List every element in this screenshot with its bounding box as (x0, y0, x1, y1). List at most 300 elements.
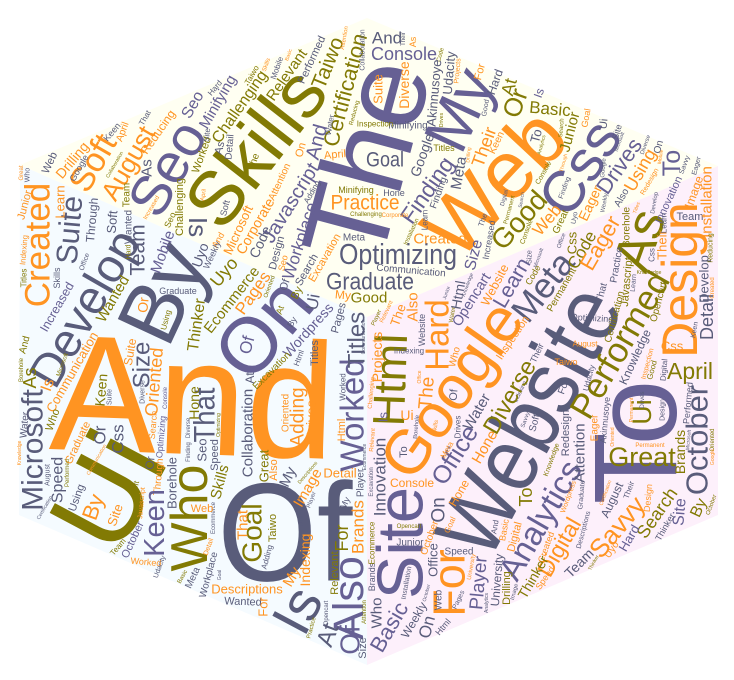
words: right panel: Pages (452, 589, 467, 610)
words: right panel: Knowledge (461, 272, 475, 298)
words: right panel: Size (526, 250, 534, 264)
words: right panel: Console (390, 476, 434, 490)
words: right panel: Develop (650, 191, 660, 214)
words: left panel: Also (268, 459, 280, 481)
words: left panel: Titles (20, 269, 28, 287)
words: left panel: For (332, 524, 352, 552)
words: right panel: Css (564, 231, 580, 254)
words: right panel: Permanent (629, 397, 635, 422)
words: left panel: Excavation (251, 350, 293, 392)
words: right panel: Html (448, 279, 468, 311)
words: right panel: August (598, 480, 627, 520)
words: top panel: Finding (558, 176, 572, 200)
words: left panel: Soft (104, 209, 121, 234)
words: right panel: Digital (659, 358, 669, 381)
words: left panel: Adding (259, 544, 275, 570)
words: right panel: The (387, 302, 409, 328)
words: top panel: Challenging (350, 212, 382, 218)
words: right panel: Who (447, 345, 463, 368)
words: left panel: Taiwo (267, 514, 279, 542)
words: left panel: Oriented (263, 275, 277, 299)
word: Of: Of (218, 454, 354, 610)
words: top panel: The (246, 152, 262, 172)
word: Web: Web (405, 91, 585, 275)
words: top panel: Taiwo (307, 34, 349, 92)
words: left panel: At (274, 304, 286, 316)
words: left panel: Udacity (153, 554, 167, 579)
words: right panel: Skills (432, 420, 440, 434)
words: top panel: Basic (284, 48, 294, 62)
words: left panel: Communication (361, 319, 367, 354)
words: top panel: Increased (481, 220, 497, 260)
words: top panel: For (472, 62, 488, 82)
words: top panel: Excavation (306, 232, 344, 284)
words: top panel: April (114, 121, 132, 143)
words: right panel: Relevant (369, 428, 377, 452)
words: right panel: University (467, 554, 477, 580)
words: top panel: Soft (218, 198, 232, 217)
words: top panel: Drilling (465, 147, 473, 163)
words: left panel: Wordpress (279, 300, 337, 360)
words: top panel: Site (610, 123, 624, 141)
words: right panel: Opencart (648, 281, 670, 323)
word: Is: Is (259, 576, 335, 644)
words: top panel: As (213, 140, 228, 156)
words: top panel: Analytics (537, 134, 548, 155)
words: right panel: Css (661, 338, 684, 354)
words: right panel: Basic (497, 518, 511, 542)
words: right panel: Savvy (583, 490, 651, 564)
word: Skills: Skills (168, 52, 344, 244)
words: right panel (363, 166, 718, 657)
words: left panel: Microsoft (56, 352, 70, 377)
words: left panel: Or (142, 456, 158, 470)
words: right panel: Design (642, 484, 654, 512)
word: For: For (424, 549, 474, 617)
words: left panel: Worked (338, 373, 348, 401)
words: left panel: Goal (217, 570, 223, 580)
words: left panel: Opencart (324, 600, 330, 625)
words: top panel: Also (612, 186, 632, 209)
words: top panel: On (293, 141, 309, 159)
words: left panel: My (276, 464, 300, 490)
words: left panel: Diverse (140, 380, 146, 404)
words: right panel: Oriented (610, 427, 616, 447)
words: top panel: Adding (302, 179, 322, 205)
words: left panel: Ecommerce (201, 263, 263, 337)
words: left panel: Practice (306, 616, 318, 639)
words: top panel: Suite (370, 74, 386, 104)
words: right panel: Good (645, 359, 659, 381)
words: left panel: Pages (329, 301, 349, 335)
words: right panel: Google (710, 449, 716, 465)
words: left panel: Knowledge (17, 440, 23, 465)
word: Google: Google (366, 288, 538, 492)
words: top panel: Is (531, 86, 547, 100)
words: left panel: Player (356, 468, 366, 497)
words: left panel: Javascript (137, 487, 147, 519)
words: left panel: Office (79, 252, 91, 272)
words: right panel: For (556, 377, 572, 396)
words: left panel: Oriented (280, 394, 292, 432)
words: right panel: Junior (396, 538, 424, 548)
words: left panel: Goal (236, 503, 268, 563)
words: right panel: Javascript (619, 257, 635, 307)
words: left panel: Uyo (188, 240, 212, 269)
word: Css: Css (526, 108, 634, 228)
words: top panel: And (210, 231, 226, 249)
words: right panel: Inspection (640, 348, 656, 380)
word: Ui: Ui (24, 411, 192, 571)
words: top panel: Console (519, 219, 535, 245)
words: left panel: Site (104, 502, 126, 528)
words: left panel: Is (38, 376, 58, 394)
words: top panel: Search (518, 191, 526, 208)
words: left panel: Drives (303, 400, 319, 440)
words: left panel: By (289, 284, 305, 301)
words: left panel: Ui (302, 292, 324, 312)
words: right panel: Water (460, 391, 494, 433)
words: left panel: Html (292, 349, 306, 367)
words: right panel: Knowledge (616, 327, 654, 387)
words: right panel: Analytics (491, 454, 589, 586)
words: top panel: Search (558, 118, 566, 138)
words: right panel: Office (417, 370, 423, 383)
words: right panel: Office (557, 232, 568, 249)
words: right panel: Search (632, 484, 682, 542)
words: right panel: Drives (454, 416, 462, 438)
words: top panel: Relevant (263, 45, 311, 104)
words: left panel: Of (236, 334, 259, 356)
words: right panel: Opencart (449, 270, 495, 330)
words: left panel: Using (159, 309, 173, 331)
words: left panel: That (234, 509, 252, 540)
words: top panel: Or (496, 84, 534, 122)
words: left panel: By (77, 491, 109, 523)
words: top panel: Taiwo (243, 63, 261, 86)
words: top panel: Team (122, 183, 132, 207)
words: left panel: Who (24, 168, 32, 182)
words: top panel: Skills (262, 57, 272, 73)
words: left panel: Image (290, 466, 326, 510)
words: right panel: Projects (369, 332, 385, 382)
words: right panel: Team (561, 545, 597, 581)
words: right panel: Uyo (602, 539, 622, 560)
words: right panel: Meta (439, 440, 456, 460)
words: top panel: Web (40, 150, 60, 176)
words: right panel: Keen (690, 321, 700, 339)
words: right panel: On (428, 497, 450, 523)
word: As: As (602, 202, 678, 278)
words: left panel: Html (336, 419, 348, 441)
words: top panel: Corporate (233, 195, 278, 257)
words: right panel: Eager (590, 414, 600, 441)
words: left panel: August (44, 464, 52, 486)
words: right panel: Created (536, 530, 556, 564)
words: right panel: October (419, 519, 441, 557)
words: right panel: Diverse (478, 355, 542, 439)
words: right panel: Great (608, 442, 676, 472)
words: right panel: Their (528, 342, 546, 364)
words: left panel: Uyo (206, 253, 242, 291)
words: left panel: Indexing (297, 534, 313, 586)
word: On: On (196, 260, 330, 396)
words: top panel: Minifying (338, 185, 374, 195)
words: right panel: Ecommerce (368, 521, 376, 564)
words: top panel: And (372, 28, 402, 48)
words: top panel: Finding (395, 152, 459, 228)
words: right panel: Oriented (710, 428, 716, 452)
words: right panel: Code (564, 228, 600, 272)
words: right panel: Savvy (520, 411, 532, 429)
words: top panel: Finding (428, 176, 450, 210)
words: top panel: Weekly (600, 193, 610, 213)
word: Created: Created (18, 183, 58, 307)
words: top panel: Redesign (640, 167, 660, 197)
words: top panel: Challenging (209, 68, 271, 146)
words: right panel: Taiwo (554, 357, 578, 367)
words: right panel: Basic (365, 597, 413, 657)
words: right panel: The (415, 376, 439, 410)
words: top panel: Water (324, 114, 336, 136)
words: top panel: Seo (179, 88, 208, 122)
words: top panel: Code (246, 223, 274, 261)
words: right panel: Thinker (653, 512, 677, 542)
words: right panel: Microsoft (685, 429, 693, 450)
words: right panel: Borehole (413, 414, 421, 439)
words: top panel: Drilling (52, 138, 92, 182)
words: right panel: Created (710, 277, 716, 299)
words: left panel: Worked (334, 358, 370, 472)
words: top panel: Their (401, 32, 407, 46)
words: top panel: Savvy (678, 154, 692, 175)
words: top panel: Diverse (640, 134, 653, 156)
words: left panel (15, 165, 373, 659)
words: top panel: Permanent (503, 195, 517, 225)
words: top panel: Attention (267, 162, 293, 202)
words: left panel: Microsoft (16, 388, 50, 511)
words: top panel: Through (559, 153, 569, 173)
words: right panel: Hone (469, 427, 501, 467)
words: top panel: Hard (484, 67, 506, 97)
word: Develop: Develop (18, 220, 150, 396)
words: left panel: Of (277, 277, 293, 293)
words: top panel: Google (67, 153, 91, 183)
words: top panel: Size (462, 238, 486, 272)
words: right panel: Player (371, 309, 383, 327)
words: left panel: Who (43, 407, 63, 433)
words: right panel: Attention (572, 423, 588, 483)
words: left panel: Ecommerce (211, 501, 217, 534)
words: left panel: Basic (177, 569, 189, 585)
word: To: To (570, 380, 702, 504)
words: left panel: Borehole (19, 357, 25, 382)
words: left panel: Through (83, 197, 101, 243)
words: right panel: Analytics (484, 593, 490, 613)
words: right panel: Excavation (369, 467, 375, 497)
words: right panel: Who (368, 598, 386, 628)
words: top panel: Using (620, 145, 660, 195)
words: left panel: Increased (37, 280, 77, 334)
words: top panel: Hard (206, 78, 224, 98)
words: top panel: Corporate (382, 213, 409, 219)
words: left panel: Search (147, 410, 159, 440)
words: left panel: Detail (203, 537, 215, 557)
words: right panel: Is (376, 411, 390, 422)
words: left panel: Diverse (186, 417, 192, 438)
words: right panel: Code (523, 263, 543, 287)
words: top panel: Is (183, 217, 213, 237)
words: left panel: As (20, 367, 40, 389)
words: left panel: Seo (194, 438, 210, 462)
words: left panel: Optimizing (154, 415, 168, 459)
words: left panel: Using (67, 483, 87, 513)
words: top panel: Learn (420, 210, 430, 230)
words: right panel: October (706, 494, 718, 516)
words: right panel: On (415, 614, 439, 640)
words: top panel: Javascript (258, 159, 324, 247)
word: Also: Also (325, 556, 373, 640)
words: left panel: Wanted (124, 210, 134, 244)
words: top panel: Seo (276, 254, 290, 272)
words: top panel: Code (436, 47, 446, 63)
words: top panel: Eager (691, 155, 703, 176)
words: right panel: Permanent (545, 266, 579, 314)
words: top panel: Communication (376, 262, 446, 280)
words: left panel: Speed (209, 439, 221, 471)
words: right panel: Drives (640, 391, 646, 409)
words: left panel: Graduate (63, 420, 93, 466)
words: top panel: Eager (575, 182, 605, 223)
word: My: My (411, 58, 509, 162)
words: right panel: That (594, 282, 610, 304)
words: left panel: Console (163, 386, 169, 409)
words: right panel: Indexing (394, 346, 424, 356)
words: right panel: October (680, 385, 714, 495)
words: left panel: Team (126, 224, 150, 276)
words: left panel: Player (306, 491, 318, 509)
words: right panel: Optimizing (571, 312, 613, 324)
word: Design: Design (652, 202, 708, 358)
words: right panel: Eager (574, 211, 626, 275)
words: right panel: By (687, 496, 711, 520)
words: right panel: Certification (599, 479, 613, 506)
words: left panel: Worked (130, 556, 162, 568)
words: right panel: Image (682, 174, 706, 210)
words: top panel: Console (371, 44, 437, 64)
words: top panel: Mobile (269, 55, 285, 81)
words: top panel: Site (202, 127, 212, 142)
words: left panel: Titles (344, 312, 370, 368)
words: top panel: That (137, 108, 153, 127)
words: left panel: Meta (183, 565, 203, 590)
words: left panel: October (119, 519, 147, 560)
words: left panel: Hard (126, 244, 132, 260)
words: left panel: Communication (43, 329, 101, 415)
words: left panel: Size (128, 342, 156, 388)
words: left panel: Optimizing (216, 413, 222, 437)
words: right panel: April (667, 358, 713, 384)
words: right panel: Detail (697, 294, 717, 340)
words: top panel: Web (529, 201, 565, 239)
words: right panel: Practice (608, 246, 626, 284)
words: top panel: Microsoft (220, 203, 256, 257)
words: top panel: Mobile (657, 149, 665, 165)
words: right panel: Site (670, 497, 690, 526)
words: top panel: August (95, 120, 162, 206)
words: right panel: Relevant (379, 300, 395, 324)
words: left panel: My (280, 564, 305, 590)
words: top panel: Uyo (570, 211, 580, 225)
words: top panel: At (497, 76, 521, 98)
words: right panel: Hone (446, 477, 472, 509)
words: top panel: To (527, 127, 545, 145)
words: left panel: Wanted (93, 273, 133, 325)
words: right panel: Hard (418, 299, 456, 371)
words: left panel: Size (357, 637, 369, 659)
words: left panel: Communication (86, 443, 108, 477)
words: top panel: Increased (143, 195, 161, 221)
words: right panel: Titles (632, 201, 642, 215)
words: right panel: Hard (615, 522, 643, 554)
words: right panel: Installation (698, 166, 716, 238)
words: left panel: Indexing (18, 235, 30, 265)
words: top panel: Detail (223, 134, 237, 160)
words: left panel: Performed (65, 459, 71, 487)
words: right panel: Ui (400, 407, 414, 423)
words: right panel: Performed (681, 382, 695, 424)
words: right panel: Website (478, 262, 512, 308)
words: left panel: Team (108, 536, 128, 557)
words: right panel: Descriptions (576, 510, 592, 550)
words: top panel: Installation (403, 218, 421, 246)
words: left panel: Soft (129, 479, 141, 496)
words: left panel: Borehole (164, 457, 180, 509)
words: top panel: Keen (487, 130, 507, 156)
words: left panel: At (311, 619, 345, 650)
words: top panel: Goal (579, 108, 593, 128)
words: right panel: Of (448, 388, 461, 401)
words: top panel: April (324, 148, 346, 162)
words: right panel: Office (426, 420, 484, 490)
word: Optimizing: Optimizing (339, 239, 457, 271)
words: top panel: Console (535, 160, 554, 186)
words: top panel: Projects (453, 58, 463, 84)
words: left panel: Or (134, 296, 152, 313)
words: left panel: Junior (15, 189, 35, 221)
word: Site: Site (364, 487, 436, 599)
words: right panel: Challenging (368, 377, 376, 409)
words: top panel: As (408, 36, 418, 47)
words: top panel: Workplace (279, 200, 321, 282)
words: right panel: Brands (367, 562, 377, 591)
words: right panel: Knowledge (637, 270, 662, 276)
word: Seo: Seo (115, 109, 219, 227)
words: top panel: Inspection (357, 120, 393, 128)
words: top panel: Performed (296, 34, 328, 86)
words: right panel: Their (654, 230, 670, 260)
words: left panel: Detail (323, 466, 357, 480)
words: right panel: Team (677, 211, 703, 223)
words: right panel: University (488, 553, 506, 607)
words: left panel: Suite (106, 389, 114, 405)
words: left panel: Through (152, 458, 166, 496)
words: left panel: Great (256, 449, 272, 482)
words: right panel: Udacity (581, 364, 597, 392)
words: right panel: Soft (527, 413, 543, 433)
words: right panel: Speed (445, 546, 473, 558)
words: left panel: Certification (36, 495, 54, 521)
